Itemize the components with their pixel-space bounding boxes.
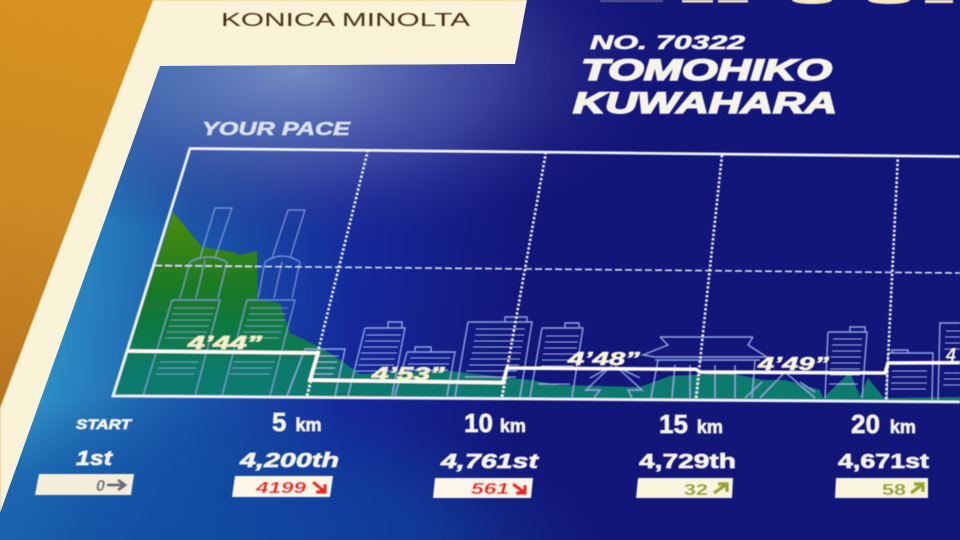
split heading: 15 km bbox=[659, 409, 723, 439]
split: 20 km bbox=[835, 409, 929, 499]
chart: elevation profile bbox=[113, 212, 960, 402]
rank change value: 4199 bbox=[255, 480, 306, 497]
rank change box bbox=[636, 478, 733, 498]
split heading: 20 km bbox=[851, 409, 916, 439]
split: start bbox=[35, 416, 134, 495]
split rank: 1st bbox=[76, 448, 114, 470]
rank change value: 58 bbox=[882, 482, 906, 499]
split rank: 4,761st bbox=[440, 451, 540, 473]
label: pace 15-20 km: 4’49” bbox=[756, 354, 829, 374]
rank change value: 561 bbox=[471, 481, 509, 498]
pace chart bbox=[113, 148, 960, 402]
building: edge block bbox=[938, 323, 960, 400]
chart: 20 km divider bbox=[886, 155, 898, 400]
rank change value: 0 bbox=[96, 478, 105, 495]
icon: up arrow bbox=[911, 484, 923, 493]
rank change value: 32 bbox=[684, 482, 708, 499]
building: block before 20 km bbox=[825, 327, 867, 398]
label: pace 10-15 km: 4’48” bbox=[566, 349, 640, 369]
split: 15 km bbox=[636, 409, 736, 499]
icon: flat arrow bbox=[107, 480, 125, 490]
building: mid block bbox=[348, 322, 405, 396]
rank change box bbox=[232, 476, 333, 497]
rank change box bbox=[433, 478, 533, 498]
chart: city skyline bbox=[143, 208, 960, 400]
split heading: 10 km bbox=[464, 408, 526, 438]
building: small block bbox=[287, 349, 345, 396]
chart: pace line bbox=[127, 351, 960, 383]
rank change box bbox=[35, 474, 134, 495]
title fragments cut off by the photo edge bbox=[600, 0, 953, 4]
split: 5 km bbox=[232, 407, 339, 497]
runner name bbox=[573, 54, 837, 120]
split rank: 4,729th bbox=[639, 451, 736, 473]
label: pace 5-10 km: 4’53” bbox=[370, 364, 445, 384]
building: low block bbox=[395, 347, 455, 396]
icon: trees bbox=[586, 366, 815, 398]
building: wide block bbox=[455, 317, 532, 397]
icon: up arrow bbox=[714, 484, 727, 493]
chart: horizontal midline bbox=[155, 266, 960, 273]
split rank: 4,671st bbox=[838, 451, 929, 473]
runner number: NO. 70322 bbox=[590, 33, 746, 54]
building: left tower bbox=[143, 208, 232, 396]
chart: 5 km divider bbox=[307, 150, 368, 396]
icon: down arrow bbox=[313, 482, 325, 492]
building: block right of 10 km bbox=[530, 323, 583, 397]
split heading: START bbox=[76, 416, 133, 432]
heading: your pace: YOUR PACE bbox=[202, 119, 351, 139]
runner name: KUWAHARA bbox=[573, 87, 837, 120]
chart: frame bbox=[113, 148, 960, 402]
building: second tower bbox=[222, 210, 305, 396]
rank change box bbox=[835, 478, 928, 498]
building: block after 20 km bbox=[887, 350, 933, 400]
label: pace 20-25 km: 4 bbox=[945, 345, 956, 365]
icon: down arrow bbox=[513, 484, 525, 493]
split: 10 km bbox=[433, 408, 540, 498]
split rank: 4,200th bbox=[239, 450, 339, 472]
logo: Konica Minolta: KONICA MINOLTA bbox=[221, 10, 470, 30]
runner name: TOMOHIKO bbox=[581, 54, 832, 87]
chart: 10 km divider bbox=[502, 152, 546, 397]
chart: 15 km divider bbox=[696, 155, 722, 399]
label: pace 0-5 km: 4’44” bbox=[186, 333, 262, 353]
icon: gate bbox=[643, 337, 767, 398]
split heading: 5 km bbox=[272, 407, 321, 437]
